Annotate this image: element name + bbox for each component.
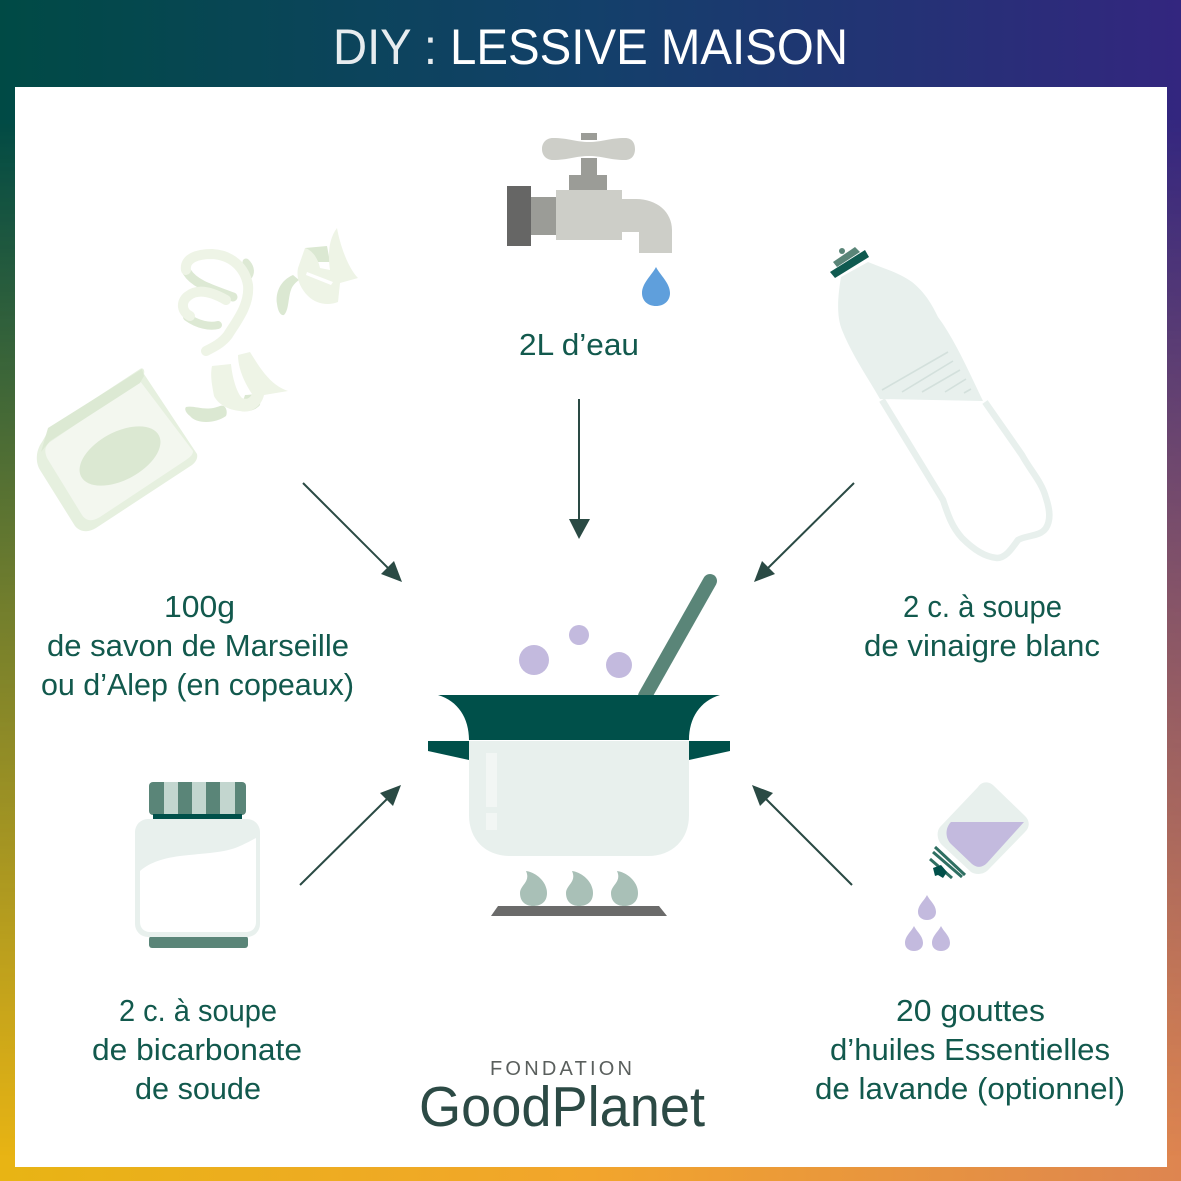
label: bicarbonate: 2 c. à soupe [119, 993, 277, 1028]
flames [520, 871, 638, 906]
shaving: spiral [183, 254, 250, 351]
label: essential oil: de lavande (optionnel) [815, 1071, 1125, 1106]
label: bicarbonate: de soude [135, 1071, 261, 1106]
label: vinegar [864, 589, 1100, 663]
icon: water tap [507, 133, 672, 306]
label: soap: 100g [164, 589, 235, 624]
title: DIY : [333, 19, 437, 75]
shaving: lower curl [185, 406, 227, 422]
arrow: bicarbonate to pot [300, 785, 401, 885]
label: soap: de savon de Marseille [47, 628, 349, 663]
bubbles [519, 625, 632, 678]
label: essential oil: 20 gouttes [896, 993, 1045, 1028]
logo: Fondation GoodPlanet: GoodPlanet [419, 1075, 705, 1139]
burner [491, 906, 667, 916]
label: vinegar: 2 c. à soupe [903, 589, 1062, 624]
spoon [645, 581, 710, 696]
arrow: water to pot [569, 399, 590, 539]
logo: Fondation GoodPlanet: FONDATION [490, 1058, 632, 1080]
label: essential oil: d’huiles Essentielles [830, 1032, 1110, 1067]
arrow: soap to pot [303, 483, 402, 582]
title: LESSIVE MAISON [450, 19, 848, 75]
arrow: essential oil to pot [752, 785, 852, 885]
label: vinegar: de vinaigre blanc [864, 628, 1100, 663]
icon: essential oil bottle and drops [905, 782, 1029, 951]
icon: soap and shavings [37, 228, 358, 531]
icon: cooking pot on burner [428, 581, 730, 916]
pot body [469, 741, 689, 856]
label: bicarbonate [92, 993, 302, 1106]
label: water: 2L d’eau [519, 327, 639, 362]
icon: bicarbonate jar [135, 782, 260, 948]
icon: bottle of vinegar [830, 247, 1049, 558]
arrow: vinegar to pot [754, 483, 854, 582]
label: essential oil [815, 993, 1125, 1106]
label: bicarbonate: de bicarbonate [92, 1032, 302, 1067]
pot lid and handles [438, 695, 720, 740]
shaving: right curl [277, 275, 299, 315]
label: soap: ou d’Alep (en copeaux) [41, 667, 354, 702]
label: soap [41, 589, 354, 702]
